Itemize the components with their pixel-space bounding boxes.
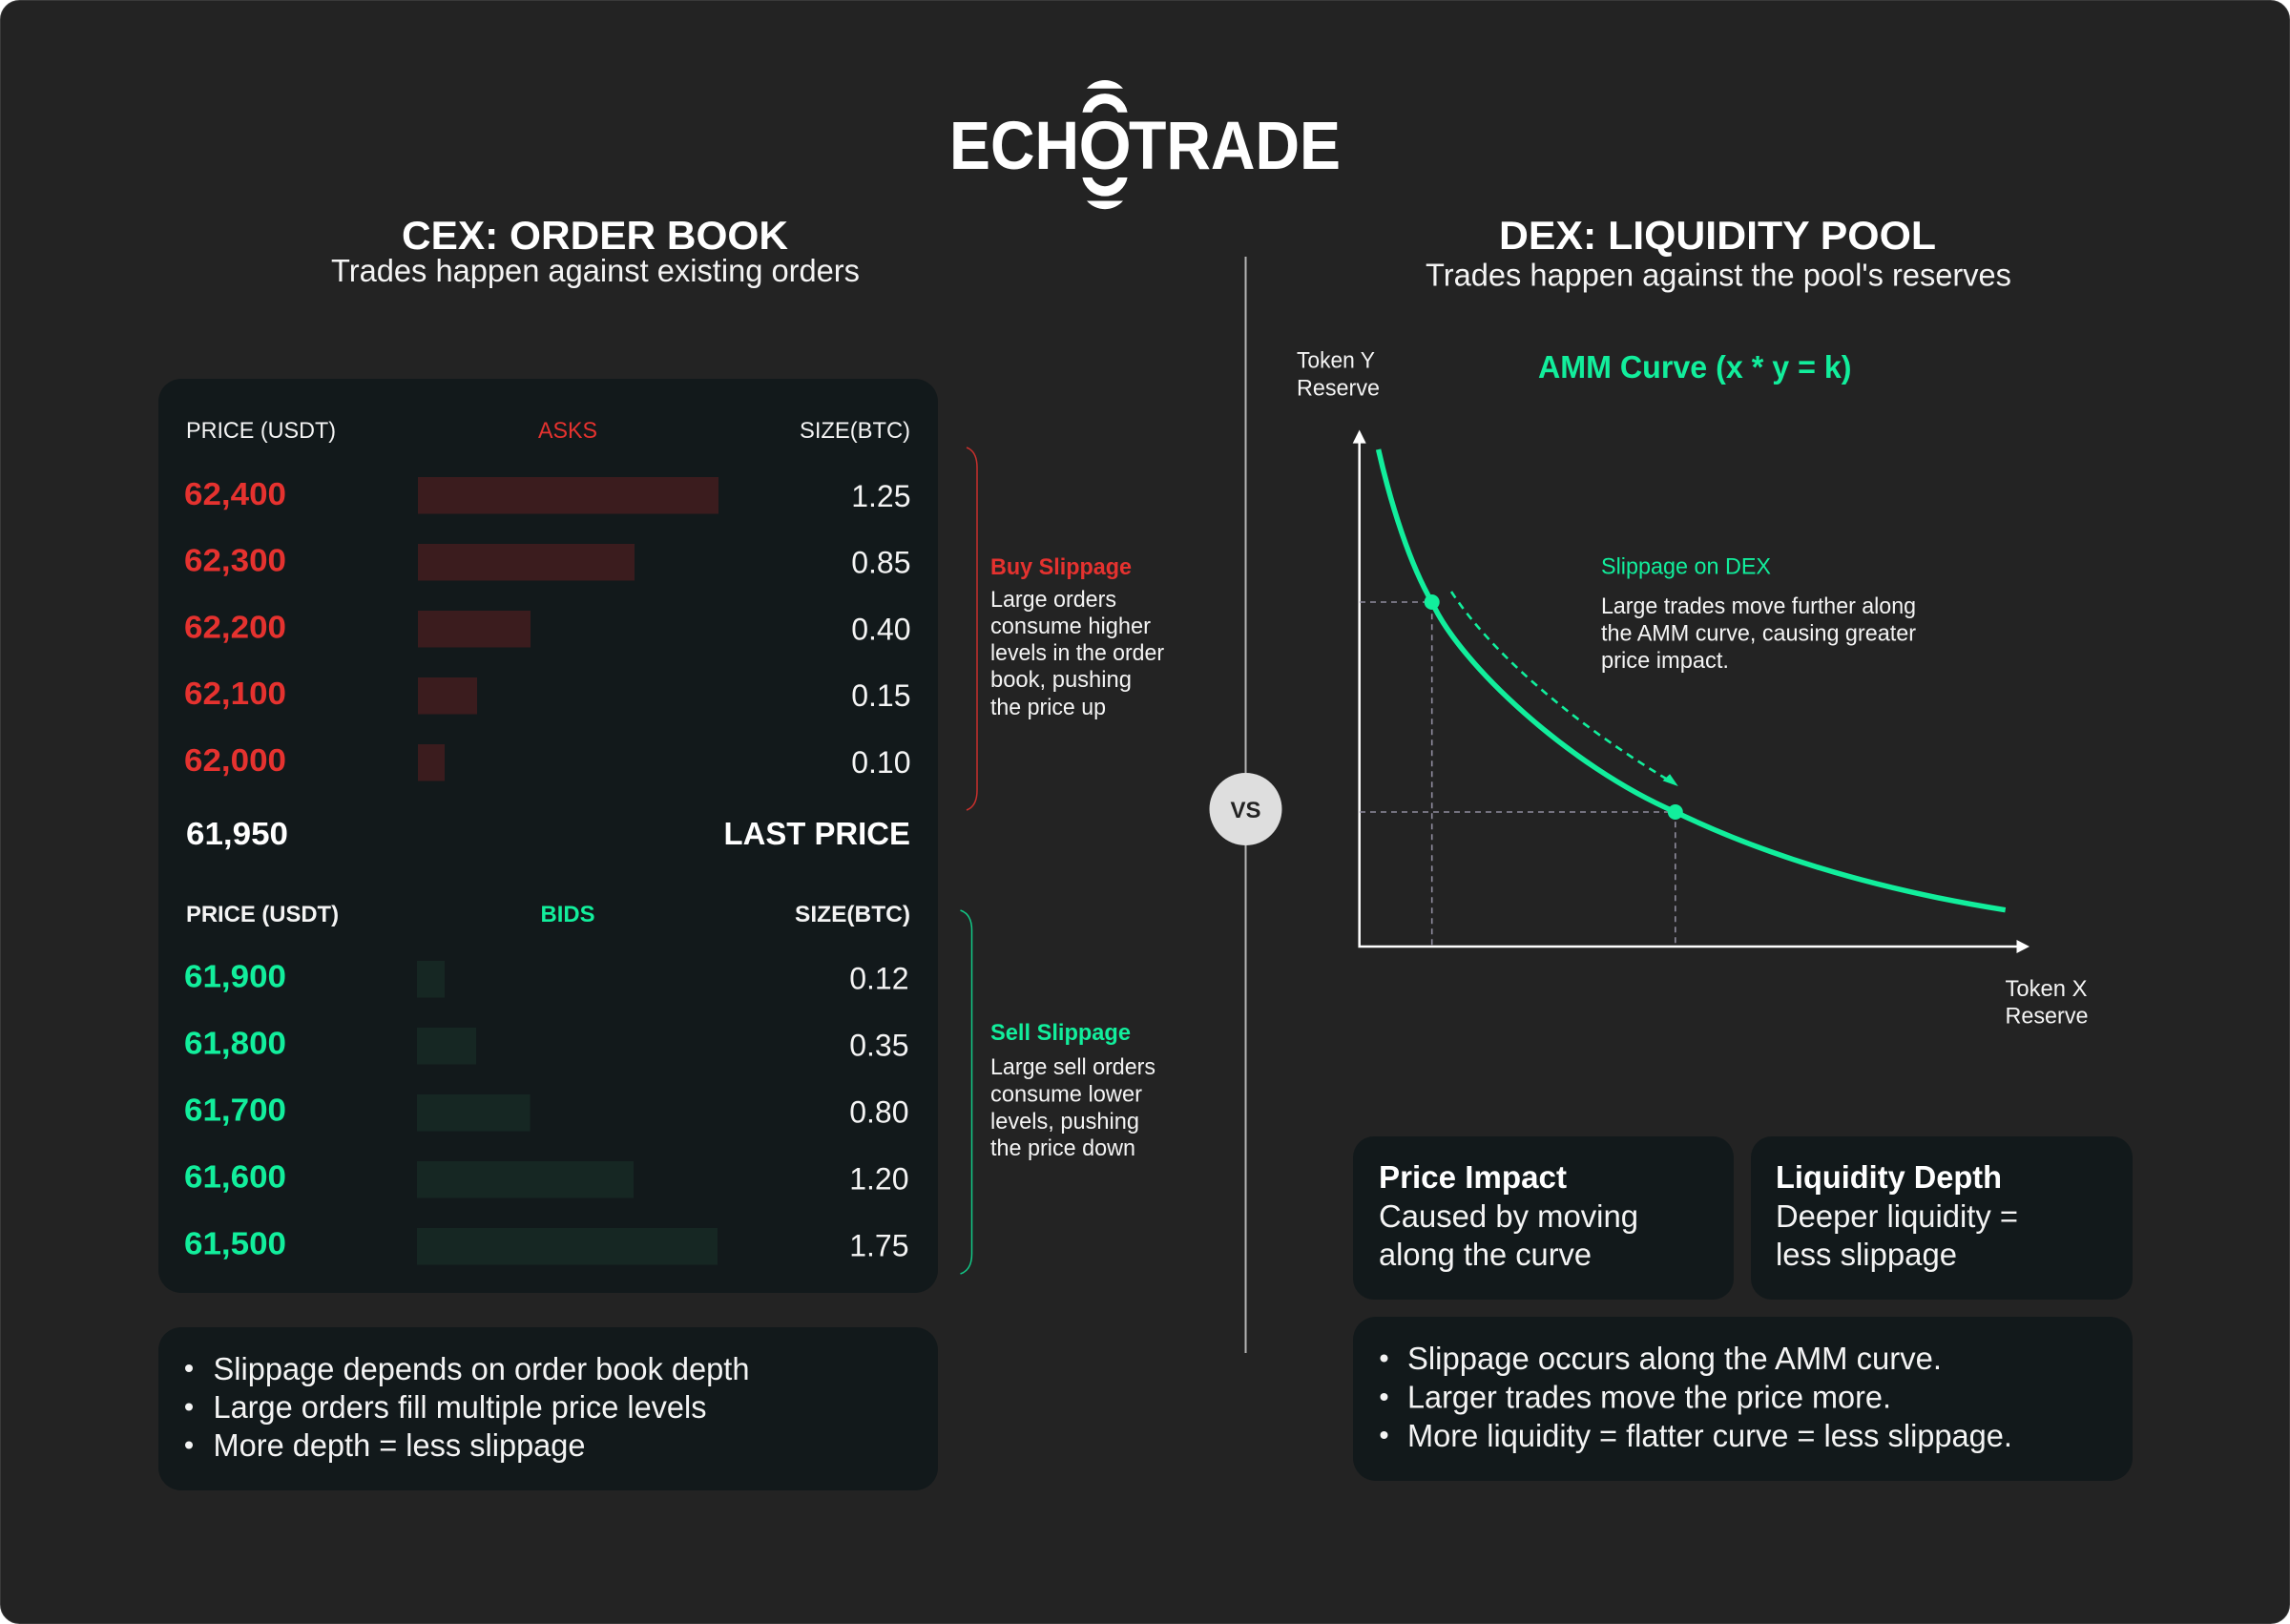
y axis label: Reserve (1297, 376, 1380, 401)
ask row 62,300: 62,300 (184, 543, 286, 578)
bids header: BIDS (540, 902, 595, 927)
bid row 61,600 (184, 1158, 908, 1198)
ask row 62,300: 0.85 (851, 546, 910, 580)
card: price impact: along the curve (1379, 1237, 1592, 1272)
heading: DEX liquidity pool: DEX: LIQUIDITY POOL (1499, 213, 1936, 258)
ask row 62,100: 0.15 (851, 678, 910, 713)
ask row 62,000: 62,000 (184, 742, 286, 778)
card: liquidity depth: Liquidity Depth (1776, 1159, 2002, 1195)
bid row 61,600: 1.20 (849, 1162, 908, 1197)
centre divider with VS badge (1210, 257, 1282, 1353)
annotation: slippage on DEX (1601, 553, 1916, 674)
bids header (186, 902, 910, 927)
bid row 61,700: 61,700 (184, 1092, 286, 1128)
panel: DEX takeaways: Slippage occurs along the AMM curve. (1407, 1341, 1942, 1376)
ask row 62,300 (184, 543, 910, 580)
card: price impact: Price Impact (1379, 1159, 1567, 1195)
bid row 61,700 (184, 1092, 908, 1132)
panel: CEX takeaways: Large orders fill multiple price levels (214, 1389, 706, 1425)
ask row 62,100 (184, 676, 910, 714)
callout: sell slippage (960, 910, 1155, 1274)
callout: buy slippage (967, 448, 1164, 810)
annotation: slippage on DEX: Slippage on DEX (1601, 553, 1771, 580)
y axis label (1297, 347, 1380, 401)
logo: EchoTrade (949, 80, 1341, 209)
callout: sell slippage: Sell Slippage (990, 1020, 1131, 1046)
logo: EchoTrade: ECH (949, 109, 1079, 184)
ask row 62,200: 0.40 (851, 612, 910, 646)
x axis label: Reserve (2006, 1004, 2088, 1029)
panel: DEX takeaways (1353, 1317, 2133, 1481)
bid row 61,500 (184, 1225, 908, 1265)
callout: buy slippage: the price up (990, 695, 1106, 720)
ask row 62,000: 0.10 (851, 745, 910, 780)
card: liquidity depth: Deeper liquidity = (1776, 1198, 2018, 1234)
x axis label (2006, 976, 2088, 1029)
asks header (186, 418, 910, 444)
bids header: PRICE (USDT) (186, 902, 339, 927)
slippage arrow (1451, 592, 1677, 785)
logo: EchoTrade: TRADE (1129, 109, 1341, 184)
bid row 61,900 (184, 959, 908, 998)
last price row (186, 816, 910, 851)
chart: AMM curve (1297, 347, 2088, 1029)
bid row 61,900: 61,900 (184, 959, 286, 994)
callout: buy slippage: Buy Slippage (990, 554, 1132, 580)
callout: sell slippage: consume lower (990, 1082, 1142, 1107)
curve (1379, 449, 2006, 910)
panel: CEX takeaways: More depth = less slippage (214, 1427, 586, 1463)
annotation: slippage on DEX: the AMM curve, causing greater (1601, 620, 1916, 647)
panel: CEX takeaways: Slippage depends on order book depth (214, 1351, 750, 1386)
bid row 61,700: 0.80 (849, 1095, 908, 1130)
panel: DEX takeaways: More liquidity = flatter curve = less slippage. (1407, 1418, 2012, 1453)
ask row 62,000 (184, 742, 910, 781)
heading: DEX liquidity pool: Trades happen against the pool's reserves (1426, 258, 2011, 292)
callout: sell slippage: the price down (990, 1135, 1135, 1161)
bids header: SIZE(BTC) (795, 902, 910, 927)
asks header: ASKS (538, 418, 597, 444)
heading: CEX order book: CEX: ORDER BOOK (402, 213, 788, 258)
ask row 62,400: 1.25 (851, 479, 910, 513)
ask row 62,100: 62,100 (184, 676, 286, 711)
ask row 62,400 (184, 476, 910, 513)
panel: CEX takeaways (158, 1327, 938, 1490)
annotation: slippage on DEX: Large trades move further along (1601, 593, 1916, 619)
axes (1353, 429, 2030, 953)
ask row 62,200 (184, 609, 910, 647)
callout: buy slippage: book, pushing (990, 667, 1132, 693)
ask row 62,400: 62,400 (184, 476, 286, 511)
asks header: SIZE(BTC) (800, 418, 910, 444)
bid row 61,600: 61,600 (184, 1158, 286, 1195)
heading: DEX liquidity pool (1426, 213, 2011, 292)
bid row 61,500: 61,500 (184, 1225, 286, 1261)
last price row: LAST PRICE (723, 816, 910, 851)
card: liquidity depth: less slippage (1776, 1237, 1957, 1272)
callout: sell slippage: Large sell orders (990, 1054, 1155, 1080)
callout: sell slippage: levels, pushing (990, 1109, 1139, 1135)
panel: order book (158, 379, 938, 1293)
centre divider with VS badge: VS (1230, 798, 1261, 823)
bid row 61,800: 61,800 (184, 1025, 286, 1061)
bid row 61,800: 0.35 (849, 1029, 908, 1063)
chart title: AMM Curve (x * y = k) (1538, 349, 1851, 385)
ask row 62,200: 62,200 (184, 609, 286, 644)
card: liquidity depth (1751, 1136, 2133, 1300)
panel: DEX takeaways: Larger trades move the price more. (1407, 1380, 1891, 1414)
callout: buy slippage: levels in the order (990, 640, 1164, 666)
last price row: 61,950 (186, 816, 288, 851)
bid row 61,800 (184, 1025, 908, 1065)
x axis label: Token X (2006, 976, 2088, 1002)
annotation: slippage on DEX: price impact. (1601, 648, 1729, 674)
curve points (1425, 594, 1683, 820)
heading: CEX order book: Trades happen against existing orders (331, 253, 860, 288)
card: price impact (1353, 1136, 1734, 1300)
bid row 61,900: 0.12 (849, 962, 908, 996)
y axis label: Token Y (1297, 347, 1375, 374)
callout: buy slippage: consume higher (990, 614, 1151, 639)
logo: EchoTrade: O (1078, 109, 1132, 184)
heading: CEX order book (331, 213, 860, 288)
card: price impact: Caused by moving (1379, 1198, 1638, 1234)
asks header: PRICE (USDT) (186, 418, 336, 444)
callout: buy slippage: Large orders (990, 587, 1116, 613)
bid row 61,500: 1.75 (849, 1229, 908, 1263)
guide lines (1360, 602, 1676, 947)
